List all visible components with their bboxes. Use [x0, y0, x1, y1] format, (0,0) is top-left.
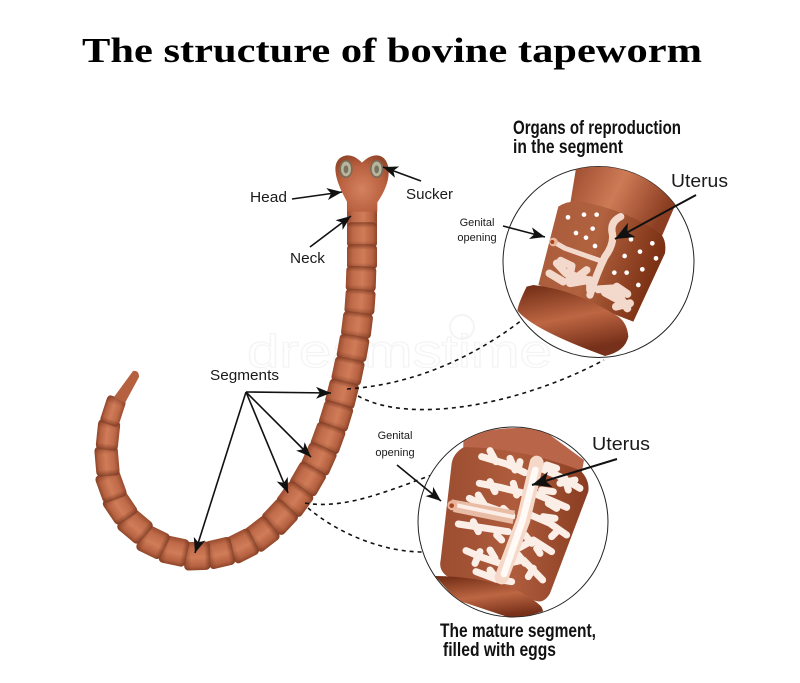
- top of mature segment: [463, 428, 584, 473]
- neck: [347, 190, 377, 226]
- watermark: dreamstime: [247, 325, 552, 377]
- label: genital opening upper: [457, 217, 497, 244]
- arrow: uterus upper: [615, 195, 696, 239]
- arrow: segments middle: [246, 392, 311, 457]
- lower cap: [435, 576, 545, 620]
- heading: organs of reproduction: Organs of reproduction: [513, 118, 681, 139]
- suckers: [339, 160, 383, 178]
- white egg dots: [566, 212, 658, 287]
- head: [335, 155, 389, 212]
- arrow: head: [292, 192, 342, 199]
- label: uterus lower: Uterus: [592, 434, 650, 454]
- heading: mature segment: The mature segment,: [440, 621, 596, 642]
- lower segment cap: [517, 285, 628, 356]
- heading: mature segment: filled with eggs: [443, 640, 556, 661]
- label: genital opening lower: [375, 430, 415, 459]
- segment body: [538, 201, 665, 322]
- arrows: [195, 167, 696, 553]
- body segments: [94, 222, 377, 571]
- mature segment body: [440, 447, 589, 601]
- arrow: genital opening lower: [397, 465, 441, 501]
- branched uterus: [458, 451, 580, 582]
- arrow: sucker: [383, 167, 421, 181]
- label: genital opening lower: Genital: [378, 430, 412, 442]
- dashed connector lines: [305, 320, 604, 552]
- label: head: Head: [250, 189, 287, 206]
- title: The structure of bovine tapeworm: [82, 31, 702, 70]
- label: neck: Neck: [290, 250, 325, 267]
- uterus branches: [549, 217, 630, 308]
- label: genital opening upper: opening: [457, 232, 497, 244]
- arrow: genital opening upper: [503, 226, 545, 237]
- watermark: [247, 315, 552, 377]
- heading: mature segment: [440, 621, 596, 661]
- top of segment: [570, 167, 675, 237]
- heading: organs of reproduction: in the segment: [513, 137, 624, 158]
- label: sucker: Sucker: [406, 186, 453, 203]
- arrow: segments lower: [246, 392, 288, 493]
- inset: organs of reproduction: [503, 166, 694, 358]
- arrow: uterus lower: [532, 459, 617, 485]
- label: genital opening upper: Genital: [460, 217, 494, 229]
- arrow: neck: [310, 216, 351, 247]
- tapeworm body: [94, 155, 389, 571]
- genital pore: [549, 238, 558, 246]
- label: genital opening lower: opening: [375, 447, 415, 459]
- uterus stem: [502, 463, 537, 577]
- inset: mature segment: [418, 427, 608, 620]
- label: uterus upper: Uterus: [671, 171, 728, 191]
- arrow: segments upper: [246, 392, 331, 393]
- heading: organs of reproduction: [513, 118, 681, 158]
- genital canal: [452, 499, 515, 524]
- label: segments: Segments: [210, 367, 279, 384]
- arrow: segments tail: [195, 392, 246, 553]
